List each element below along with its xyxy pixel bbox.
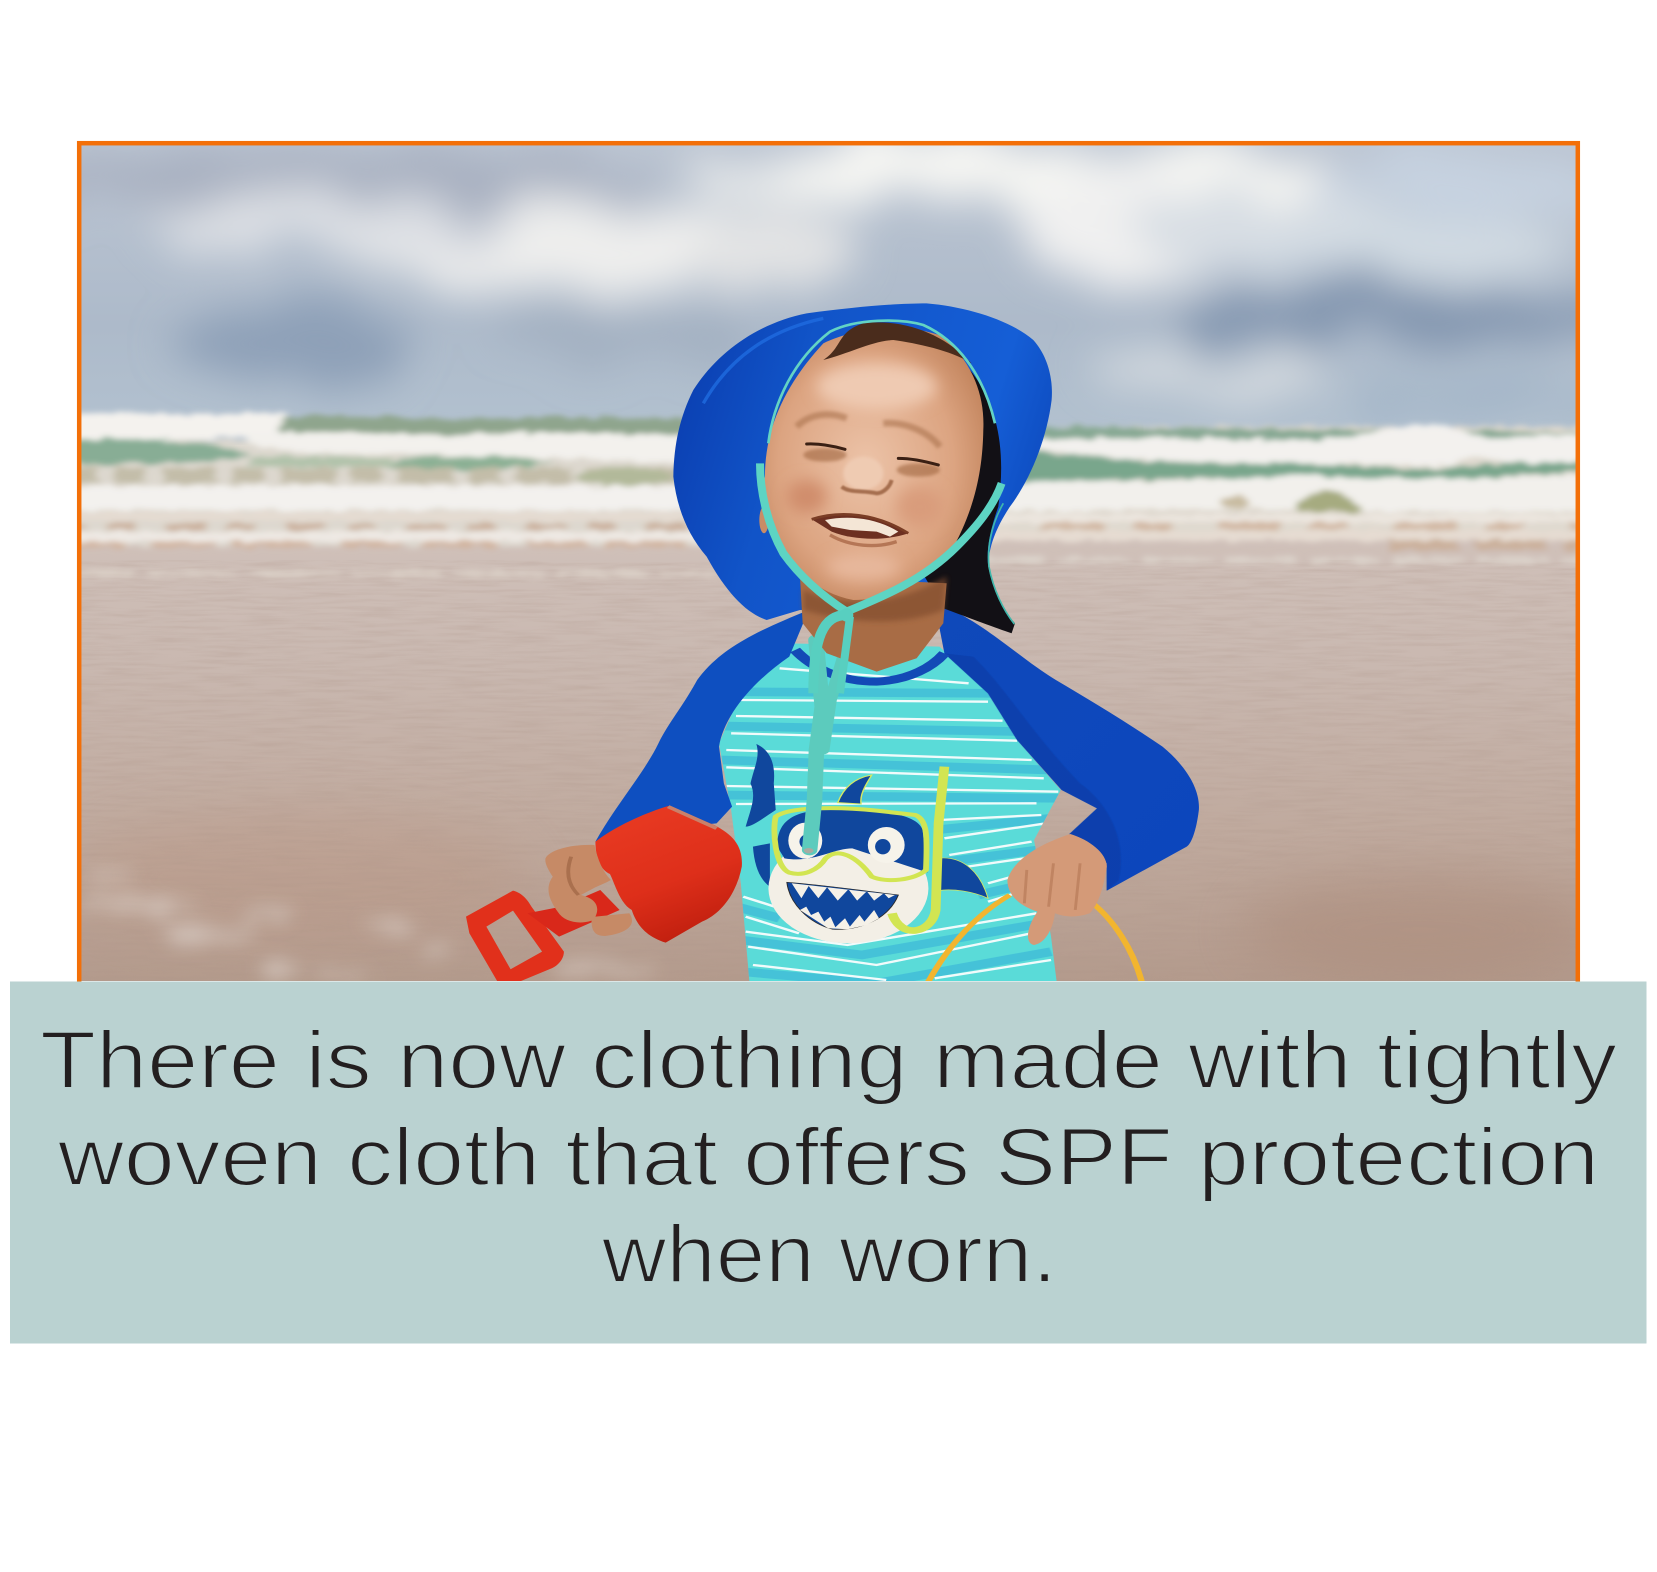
right waves	[975, 423, 1612, 560]
neck	[800, 577, 947, 672]
sleeve shading	[944, 653, 1121, 891]
ear	[759, 507, 769, 533]
caption background	[10, 982, 1646, 1344]
hat brim	[673, 303, 1052, 620]
right hand	[1007, 834, 1107, 945]
caption text: There is now clothing made with tightly	[40, 1015, 1617, 1106]
shovel blade	[595, 806, 742, 943]
hat inner band	[768, 321, 995, 443]
beach sand and wet sheen	[70, 530, 1600, 985]
strap knot and short ends	[813, 608, 853, 693]
left sleeve	[595, 610, 809, 842]
red toy shovel	[466, 806, 742, 983]
shirt darker bands	[721, 692, 1061, 983]
long chin-strap ends	[804, 640, 848, 853]
shark lower tail	[753, 843, 770, 887]
nose	[842, 457, 892, 493]
dorsal fin	[838, 775, 872, 804]
snorkel mask and tube	[774, 767, 944, 931]
shoreline foam on the sand	[80, 868, 660, 979]
right hand knuckle shading	[1024, 863, 1080, 910]
shark print	[746, 744, 988, 943]
shark eyes	[788, 823, 905, 863]
caption panel	[10, 982, 1646, 1344]
smile	[812, 514, 908, 546]
hat stitched rim highlight	[703, 318, 823, 403]
shirt torso	[719, 643, 1061, 983]
collar	[795, 650, 944, 682]
caption text: woven cloth that offers SPF protection	[57, 1112, 1599, 1203]
neck shadow	[803, 577, 947, 621]
flap teal edge	[989, 503, 1014, 624]
shark head	[777, 809, 927, 873]
shark mouth and teeth	[787, 882, 898, 929]
caption text: when worn.	[601, 1209, 1057, 1300]
sand on shovel rim	[668, 807, 717, 828]
shirt white stripes	[726, 668, 1058, 980]
chin strap	[760, 463, 1002, 612]
caption text	[40, 1015, 1617, 1300]
shark tail	[746, 744, 776, 827]
face	[762, 328, 983, 600]
child: head and hat	[673, 303, 1052, 693]
eyes closed	[807, 444, 938, 465]
eye shadows	[803, 448, 940, 477]
photo: child at the beach	[10, 138, 1630, 985]
hair	[823, 322, 972, 363]
sky base	[81, 145, 1576, 445]
infographic canvas	[10, 140, 1646, 1344]
shovel handle	[466, 891, 564, 983]
right sleeve	[935, 603, 1199, 891]
shovel shaft	[528, 890, 620, 937]
forehead and cheek highlights	[787, 363, 943, 580]
photo frame: orange border	[79, 143, 1578, 1043]
eyebrows	[797, 415, 940, 447]
left hand	[545, 845, 632, 936]
plastic ring	[927, 895, 1142, 983]
left waves	[45, 412, 714, 573]
clouds	[82, 146, 1576, 416]
hat neck flap shadow	[917, 370, 1015, 633]
left hand shadow	[568, 857, 578, 895]
shark white body	[768, 848, 928, 944]
shark side fin	[937, 858, 988, 898]
child: shirt, arms and toys	[466, 603, 1199, 983]
